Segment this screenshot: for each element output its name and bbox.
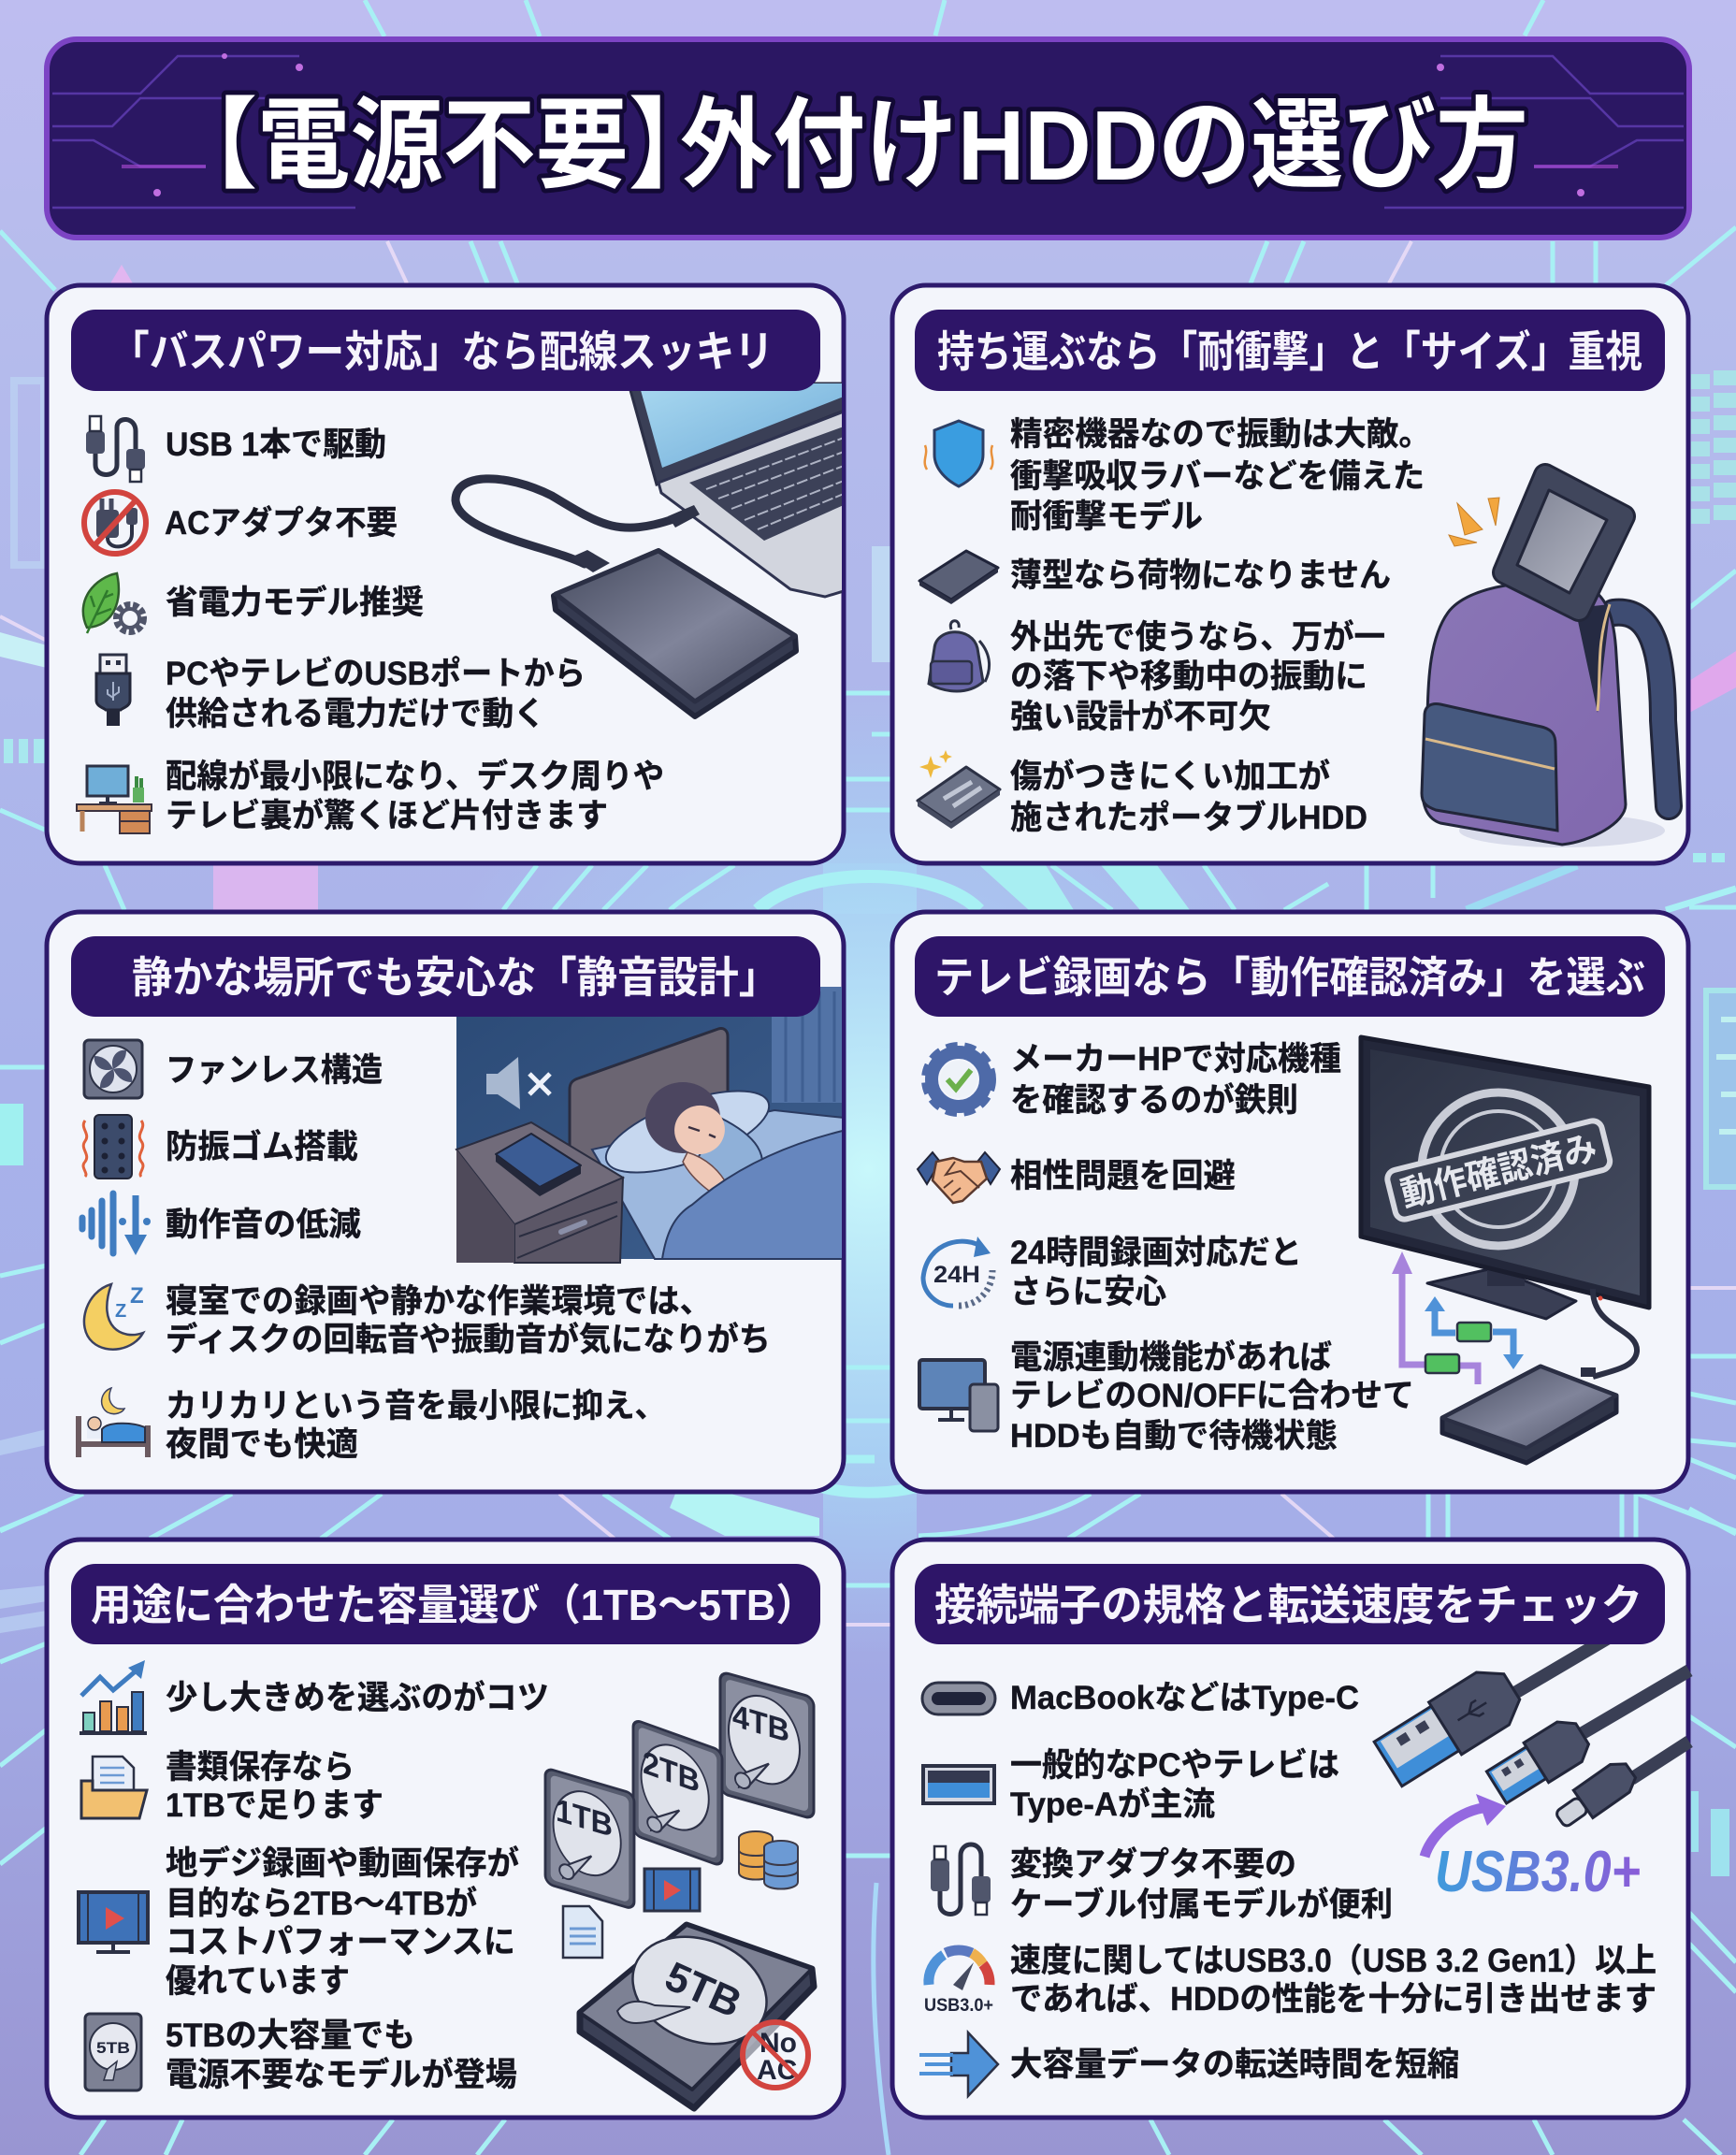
heading bar [71, 1564, 820, 1644]
heading bar [915, 1564, 1665, 1644]
text: bundled cable [1010, 1845, 1393, 1923]
text: power sync [1010, 1339, 1414, 1454]
title banner [47, 39, 1689, 238]
icon: usb plug [96, 655, 130, 726]
text: documents [166, 1749, 383, 1824]
text: USB power: PCやテレビのUSBポートから [166, 656, 586, 692]
text: precision device: 精密機器なので振動は大敵。 [1010, 416, 1431, 453]
text: tidy wiring [166, 758, 664, 834]
panel: connection [892, 1540, 1689, 2118]
title text: 【電源不要】 [165, 91, 721, 201]
heading text: 「バスパワー対応」なら配線スッキリ [110, 327, 774, 376]
no AC badge: AC [757, 2055, 797, 2086]
text: precision device [1010, 416, 1431, 535]
icon: 5TB drive [85, 2014, 141, 2090]
no AC badge [743, 2022, 808, 2088]
illustration: bedroom scene [456, 987, 846, 1263]
text: recording: 優れています [166, 1963, 350, 2000]
text: recording: 地デジ録画や動画保存が [166, 1844, 519, 1882]
text: outdoors [1010, 619, 1385, 735]
icon: 5TB drive: 5TB [96, 2039, 130, 2057]
illustration: laptop and portable HDD [456, 383, 851, 716]
icon: slim HDD [919, 551, 998, 604]
text: 24 hours: さらに安心 [1010, 1274, 1166, 1310]
stamp label: 動作確認済み [1397, 1129, 1601, 1215]
icon: 24H: 24H [933, 1262, 980, 1288]
icon: folder [81, 1757, 147, 1818]
text: 5TB [166, 2018, 517, 2093]
icon: handshake [918, 1152, 1000, 1203]
icon: TV and phone [919, 1360, 998, 1431]
heading bar [915, 936, 1665, 1017]
icon: shield [925, 421, 992, 486]
icon: moon: Z [130, 1283, 144, 1309]
icon: speed gauge [924, 1950, 993, 2016]
icon: speed arrow [919, 2032, 998, 2096]
text: precision device: 耐衝撃モデル [1010, 498, 1203, 535]
heading text: 持ち運ぶなら「耐衝撃」と「サイズ」重視 [937, 327, 1642, 376]
text: 5TB: 5TBの大容量でも [166, 2018, 415, 2054]
text: maker HP: メーカーHPで対応機種 [1010, 1041, 1341, 1078]
text: maker HP [1010, 1041, 1341, 1119]
heading text: テレビ録画なら「動作確認済み」を選ぶ [934, 953, 1645, 1002]
text: compatibility: 相性問題を回避 [1010, 1158, 1236, 1194]
heading text: 接続端子の規格と転送速度をチェック [934, 1581, 1642, 1629]
text: USB power [166, 656, 586, 732]
panel: bus power [47, 285, 851, 863]
heading bar [71, 936, 820, 1017]
text: slim: 薄型なら荷物になりません [1010, 557, 1391, 594]
icon: video screen [79, 1892, 148, 1952]
text: power sync: テレビのON/OFFに合わせて [1010, 1378, 1414, 1414]
text: power sync: 電源連動機能があれば [1010, 1339, 1332, 1376]
title text [165, 91, 1528, 201]
icon: Type-C port [922, 1683, 995, 1714]
text: bundled cable: ケーブル付属モデルが便利 [1010, 1886, 1393, 1923]
text: power sync: HDDも自動で待機状態 [1010, 1418, 1338, 1454]
text: precision device: 衝撃吸収ラバーなどを備えた [1010, 458, 1425, 495]
heading bar [71, 310, 820, 391]
icon: sleeping in bed [79, 1388, 148, 1457]
text: maker HP: を確認するのが鉄則 [1010, 1082, 1298, 1119]
title text: 外付けHDDの選び方 [680, 91, 1528, 201]
icon: usb cable [86, 416, 145, 482]
icon: sound wave down [82, 1193, 151, 1255]
text: 24 hours [1010, 1235, 1302, 1310]
text: bedroom [166, 1283, 771, 1358]
panel: portability [892, 285, 1688, 863]
text: 省電力モデル推奨: 省電力モデル推奨 [166, 584, 424, 621]
icon: desk [77, 766, 152, 833]
text: scratch resistant: 施されたポータブルHDD [1010, 799, 1367, 836]
text: Type-C: MacBookなどはType-C [1010, 1680, 1359, 1716]
illustration: HDD stack: 4TB [732, 1698, 789, 1750]
text: recording [166, 1844, 519, 2000]
panel: capacity [47, 1540, 844, 2118]
text: USB 1本で駆動: USB 1本で駆動 [166, 427, 386, 463]
icon: fan [84, 1040, 142, 1098]
text: scratch resistant: 傷がつきにくい加工が [1010, 759, 1330, 795]
text: tidy wiring: テレビ裏が驚くほど片付きます [166, 798, 608, 834]
illustration: TV with stamp and HDD [1361, 1037, 1649, 1463]
icon: scratch-resistant HDD [918, 750, 1000, 829]
text: 5TB: 電源不要なモデルが登場 [166, 2056, 517, 2093]
text: transfer time: 大容量データの転送時間を短縮 [1010, 2046, 1459, 2083]
icon: gear check [925, 1046, 992, 1113]
panel: quiet design [47, 912, 846, 1492]
illustration: backpack with rugged HDD [1422, 475, 1669, 847]
text: bedroom: ディスクの回転音や振動音が気になりがち [166, 1321, 771, 1358]
illustration: HDD stack: 2TB [643, 1744, 700, 1801]
panel: TV recording [892, 912, 1688, 1492]
text: bundled cable: 変換アダプタ不要の [1010, 1845, 1296, 1883]
icon: no AC adapter [84, 492, 146, 554]
icon: moon: Z [115, 1301, 126, 1322]
text: rubber: 防振ゴム搭載 [166, 1128, 358, 1165]
icon: 24H [923, 1237, 992, 1306]
icon: cable [931, 1844, 991, 1915]
text: Type-A [1010, 1747, 1339, 1823]
illustration: HDD stack: 1TB [556, 1792, 613, 1844]
text: Type-A: Type-Aが主流 [1010, 1786, 1215, 1823]
text: tip: 少し大きめを選ぶのがコツ [166, 1680, 549, 1716]
icon: leaf and gear [83, 573, 143, 633]
heading text: 用途に合わせた容量選び（1TB～5TB） [91, 1581, 817, 1629]
text: scratch resistant [1010, 759, 1367, 836]
text: night: 夜間でも快適 [166, 1426, 358, 1463]
no AC badge: No [760, 2028, 797, 2059]
icon: moon [84, 1283, 144, 1350]
illustration: HDD stack: 5TB [658, 1953, 748, 2027]
text: recording: 目的なら2TB～4TBが [166, 1886, 477, 1922]
icon: growth chart [80, 1660, 147, 1733]
illustration: USB connectors [1372, 1639, 1689, 1904]
text: night [166, 1388, 666, 1463]
text: fanless: ファンレス構造 [166, 1052, 383, 1089]
text: 24 hours: 24時間録画対応だと [1010, 1235, 1302, 1271]
text: outdoors: の落下や移動中の振動に [1010, 658, 1367, 695]
text: speed: であれば、HDDの性能を十分に引き出せます [1010, 1981, 1656, 2018]
text: outdoors: 強い設計が不可欠 [1010, 699, 1271, 735]
text: documents: 1TBで足ります [166, 1787, 383, 1824]
text: USB power: 供給される電力だけで動く [166, 696, 545, 732]
text: low noise: 動作音の低減 [166, 1207, 361, 1243]
heading text: 静かな場所でも安心な「静音設計」 [132, 953, 779, 1002]
text: outdoors: 外出先で使うなら、万が一 [1010, 619, 1385, 656]
USB3.0+ logo: USB3.0+ [1435, 1840, 1641, 1904]
text: recording: コストパフォーマンスに [166, 1924, 515, 1960]
icon: Type-A port [923, 1766, 994, 1803]
text: speed: 速度に関してはUSB3.0（USB 3.2 Gen1）以上 [1010, 1943, 1656, 1979]
icon: speed gauge: USB3.0+ [924, 1996, 993, 2016]
illustration: HDD stack [545, 1671, 814, 2108]
text: night: カリカリという音を最小限に抑え、 [166, 1388, 666, 1425]
text: documents: 書類保存なら [166, 1749, 354, 1786]
text: Type-A: 一般的なPCやテレビは [1010, 1747, 1339, 1784]
heading bar [915, 310, 1665, 391]
text: tidy wiring: 配線が最小限になり、デスク周りや [166, 758, 664, 795]
icon: rubber damper [83, 1115, 143, 1179]
text: speed [1010, 1943, 1656, 2018]
text: bedroom: 寝室での録画や静かな作業環境では、 [166, 1283, 712, 1320]
text: ACアダプタ不要: ACアダプタ不要 [165, 504, 398, 542]
icon: small backpack [929, 621, 990, 691]
